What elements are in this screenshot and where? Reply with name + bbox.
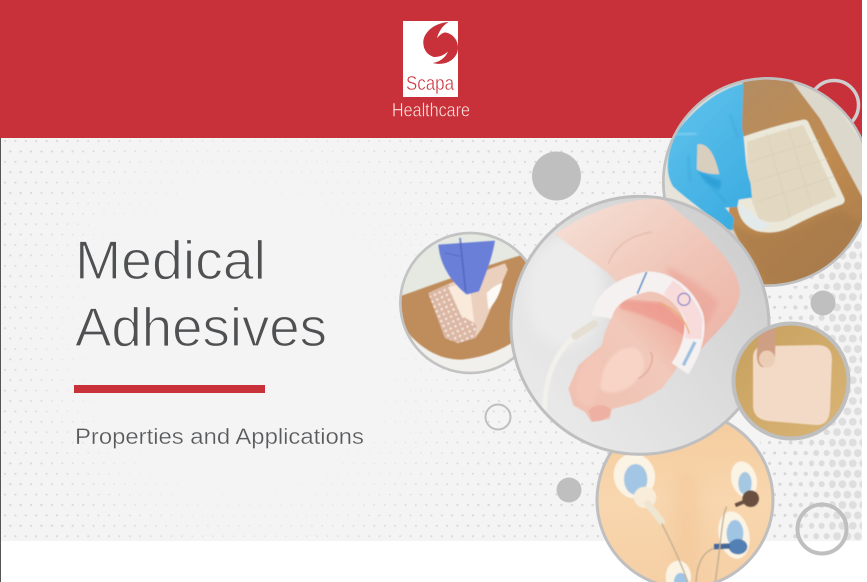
small ring	[486, 404, 510, 430]
panel: dotted grey background	[0, 138, 862, 582]
grey dot right	[810, 290, 836, 316]
header band	[0, 0, 862, 138]
title rule	[74, 385, 265, 393]
lead wires	[662, 507, 727, 582]
photo: gloved hand applying dressing to arm	[660, 75, 867, 292]
electrode upper right	[730, 460, 760, 508]
foam pad	[753, 345, 832, 425]
large ring bottom right	[798, 504, 846, 554]
title: Adhesives	[75, 296, 327, 358]
photo: silicone dressing on forearm	[399, 232, 527, 374]
photo: square foam dressing	[730, 320, 852, 442]
grey dot top	[532, 152, 581, 200]
electrode upper left	[609, 449, 662, 522]
foot	[568, 298, 691, 422]
dressing	[737, 120, 845, 232]
dressing	[428, 263, 508, 343]
sensor cable	[544, 324, 595, 409]
glove	[438, 241, 495, 295]
electrode lower right	[713, 511, 750, 560]
logo: Scapa Healthcare	[392, 21, 470, 122]
photo: sensor wrap on baby foot	[510, 195, 770, 455]
forearm	[728, 77, 867, 292]
decorative ring top right	[810, 80, 858, 130]
icon: Scapa swoosh	[423, 22, 458, 64]
glove	[668, 83, 752, 230]
sensor band	[602, 272, 695, 369]
right page margin	[862, 0, 867, 582]
Scapa wordmark: Scapa	[406, 73, 455, 95]
finger	[757, 322, 776, 367]
grey dot lower	[556, 478, 582, 502]
towel lower-left brightening	[532, 238, 604, 339]
electrode bottom	[666, 561, 691, 582]
forearm	[400, 254, 535, 360]
subtitle: Properties and Applications	[75, 424, 364, 449]
title	[75, 229, 327, 358]
toes	[598, 347, 644, 392]
leg	[555, 199, 740, 349]
title: Medical	[75, 229, 266, 291]
photo: ECG electrodes on chest	[590, 410, 777, 582]
Healthcare wordmark: Healthcare	[392, 100, 470, 122]
